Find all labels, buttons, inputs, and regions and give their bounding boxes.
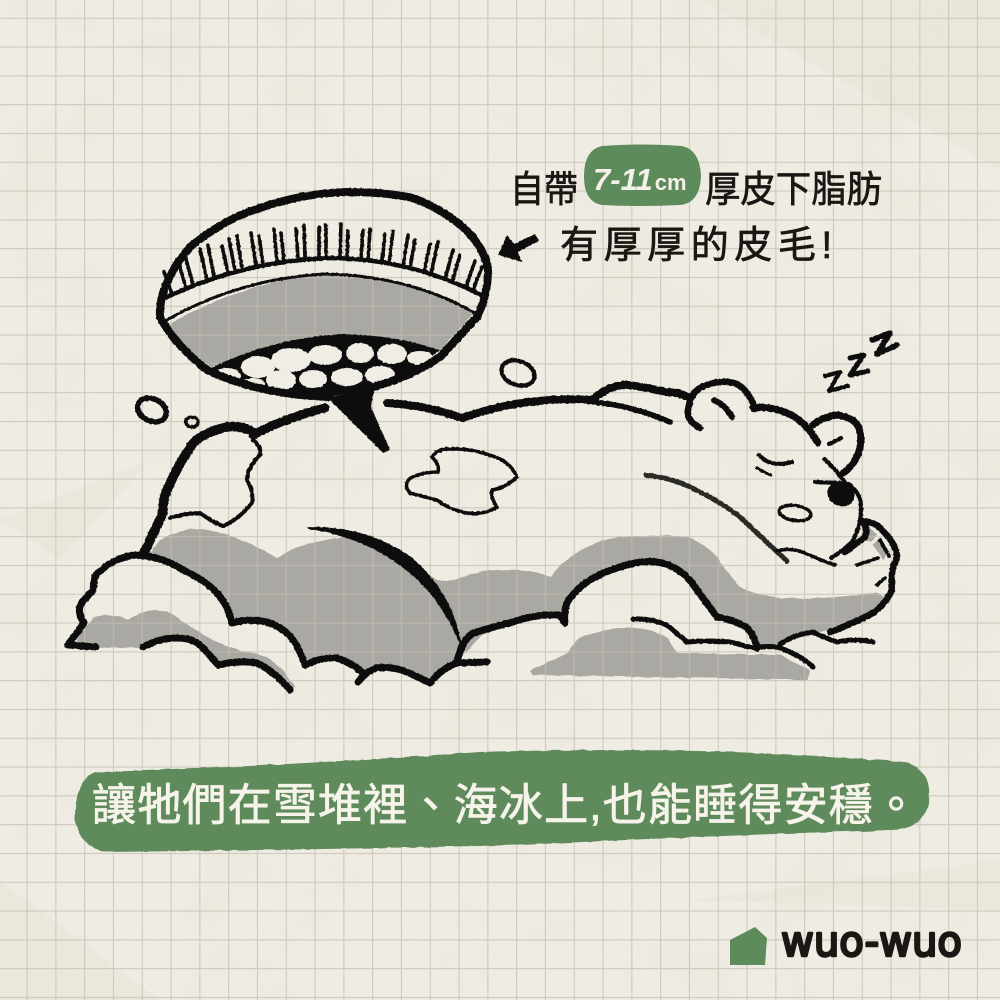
banner text: 讓牠們在雪堆裡、海冰上,也能睡得安穩。 [92, 781, 918, 830]
far ear inner [714, 400, 732, 417]
mouth [778, 503, 812, 523]
snow outlines [68, 333, 897, 690]
hind paw inner [170, 440, 260, 526]
green banner [75, 750, 929, 852]
body arc [308, 528, 460, 642]
snout [831, 484, 861, 558]
paw toe lines [857, 540, 889, 585]
brand name: wuo-wuo [781, 917, 962, 966]
ring: left small [186, 417, 198, 427]
thought bubbles [134, 356, 538, 427]
pill value: 7-11cm [593, 162, 687, 197]
snow: small right [633, 619, 813, 667]
head top [753, 408, 818, 443]
snow: lower left [143, 638, 290, 690]
shadow: right snow [530, 628, 810, 680]
fat top line [165, 274, 475, 321]
ring: right [498, 356, 538, 390]
snow: left mound [68, 555, 362, 672]
nose [823, 477, 859, 511]
eye lash [757, 468, 771, 475]
near ear inner [829, 438, 841, 444]
label: built-in: 自帶 [510, 169, 578, 210]
back left stroke [253, 408, 325, 435]
front paw [830, 521, 897, 632]
muzzle line [815, 482, 840, 483]
logo [730, 917, 962, 966]
callout text line 2: 有厚厚的皮毛! [560, 225, 832, 267]
shoulder line [593, 402, 670, 422]
cheek [824, 459, 846, 484]
icon: arrow to bubble [498, 234, 539, 262]
icon: green house [730, 927, 767, 965]
near ear [813, 415, 861, 473]
fat cells [213, 343, 433, 390]
back main stroke [387, 385, 688, 418]
skin line [165, 258, 483, 298]
fur hairs [164, 224, 482, 294]
snow: centre [358, 662, 487, 683]
fat layer cross-section bubble [160, 192, 488, 453]
belly dashes [780, 632, 873, 644]
shadow: left snow [75, 610, 295, 690]
snow: right mound [457, 562, 757, 662]
grey shadow fills [75, 274, 890, 690]
hind paw outer [143, 427, 253, 555]
black fat tissue [207, 334, 440, 397]
banner shape [75, 750, 929, 852]
green pill [584, 144, 701, 206]
arm line [646, 475, 787, 561]
shadow: bear body [146, 529, 884, 683]
z letters [825, 333, 897, 391]
z medium [850, 355, 868, 375]
callout text line 1 [510, 144, 882, 210]
label: thick subcutaneous fat: 厚皮下脂肪 [705, 169, 882, 210]
fur patch [406, 449, 517, 513]
z small [825, 372, 848, 391]
spout [328, 385, 390, 453]
far ear [688, 382, 755, 428]
z large [872, 333, 897, 354]
bubble outline [160, 192, 488, 397]
shadow: claws [862, 526, 890, 560]
eye [759, 455, 792, 464]
sleeping bear outline [143, 382, 897, 644]
ring: left large [134, 394, 170, 426]
chin [777, 549, 835, 565]
shadow: blubber layer [165, 274, 475, 370]
